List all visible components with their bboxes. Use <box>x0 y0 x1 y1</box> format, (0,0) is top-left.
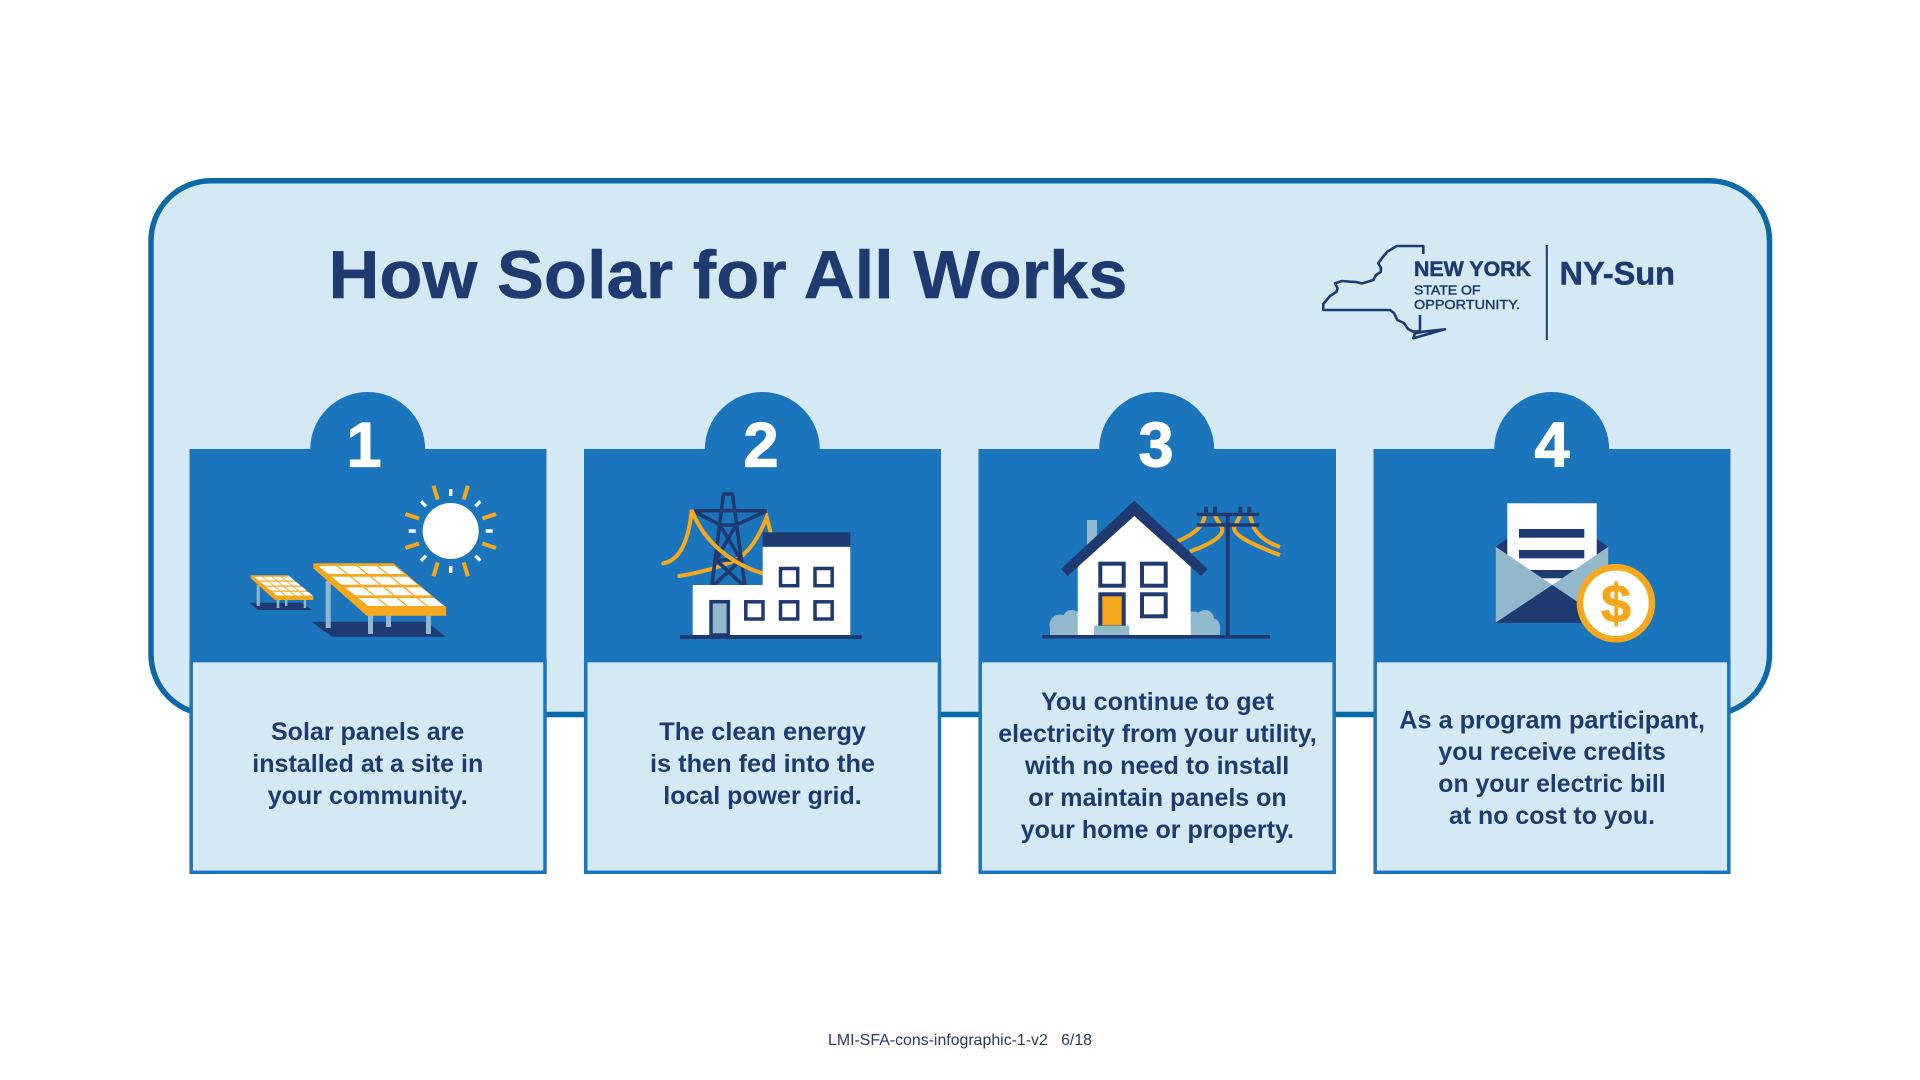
transmission tower <box>693 494 767 587</box>
step 3 text: your home or property. <box>1021 816 1294 844</box>
step 3 text: You continue to get <box>1041 688 1275 716</box>
house body <box>1078 513 1191 635</box>
panel: step 3 <box>978 392 1336 872</box>
icon: New York state outline <box>1323 246 1445 338</box>
logo text: NY-Sun: NY-Sun <box>1560 255 1675 291</box>
step 2 text: The clean energy <box>659 718 866 746</box>
letter lines <box>1519 529 1584 578</box>
step 2 text: is then fed into the <box>650 750 875 778</box>
icon: house and utility pole <box>1042 501 1280 639</box>
title: How Solar for All Works <box>328 237 1128 313</box>
building windows <box>746 568 832 619</box>
step 4 text <box>1399 706 1705 830</box>
step 1 text: Solar panels are <box>271 718 464 746</box>
door step <box>1094 626 1129 635</box>
dollar coin: $ <box>1601 574 1631 634</box>
dollar coin <box>1580 567 1652 639</box>
orange power line behind tower <box>679 517 771 576</box>
card header with number tab <box>1374 392 1730 662</box>
house windows <box>1100 564 1166 616</box>
number 1: 1 <box>346 410 382 480</box>
step 1 text: your community. <box>268 782 468 810</box>
panel: step 4 <box>1374 392 1730 872</box>
card header with number tab <box>190 392 546 662</box>
chimney <box>1087 520 1097 550</box>
large solar panel <box>312 563 446 637</box>
logo: New York State of Opportunity and NY-Sun <box>1323 245 1675 340</box>
step 4 text: As a program participant, <box>1399 706 1705 734</box>
orange power line in front of tower <box>663 510 763 574</box>
footer reference text: LMI-SFA-cons-infographic-1-v2 6/18 <box>828 1032 1092 1049</box>
step 4 text: at no cost to you. <box>1449 802 1655 830</box>
card text box <box>980 661 1334 872</box>
step 2 text <box>650 718 875 810</box>
card header with number tab <box>978 392 1336 662</box>
icon: envelope with bill and dollar coin <box>1496 503 1652 639</box>
step 3 text: or maintain panels on <box>1028 784 1287 812</box>
utility pole <box>1197 507 1259 635</box>
number 4: 4 <box>1534 410 1570 480</box>
bushes <box>1050 610 1220 636</box>
card text box <box>191 661 545 872</box>
ground line <box>680 635 862 639</box>
panel: step 1 <box>190 392 546 872</box>
logo text: State of: STATE OF <box>1414 282 1481 297</box>
step 3 text: electricity from your utility, <box>998 720 1317 748</box>
letter <box>1507 503 1597 585</box>
step 4 text: you receive credits <box>1438 738 1666 766</box>
icon: solar panels and sun <box>249 486 496 637</box>
sun <box>405 486 496 576</box>
envelope front <box>1496 585 1608 623</box>
small solar panel <box>249 575 313 610</box>
building <box>693 547 850 635</box>
logo divider <box>1546 245 1548 340</box>
logo text: New York: NEW YORK <box>1414 258 1531 281</box>
logo text: Opportunity: OPPORTUNITY. <box>1414 297 1520 312</box>
step 3 text <box>998 688 1317 844</box>
number 3: 3 <box>1138 410 1174 480</box>
step 1 text: installed at a site in <box>252 750 483 778</box>
number 2: 2 <box>743 410 779 480</box>
building door <box>711 602 728 635</box>
step 1 text <box>252 718 483 810</box>
step 3 text: with no need to install <box>1024 752 1289 780</box>
card text box <box>1375 661 1729 872</box>
envelope side flaps <box>1496 547 1608 623</box>
house roof <box>1061 501 1208 576</box>
orange utility wires <box>1178 516 1280 555</box>
panel: step 2 <box>584 392 941 872</box>
ground line <box>1042 635 1270 639</box>
house door <box>1100 594 1124 627</box>
envelope back <box>1496 538 1608 623</box>
step 4 text: on your electric bill <box>1438 770 1666 798</box>
background panel <box>151 181 1770 714</box>
card text box <box>586 661 940 872</box>
card header with number tab <box>584 392 941 662</box>
icon: transmission tower and building <box>663 494 862 639</box>
step 2 text: local power grid. <box>663 782 862 810</box>
building roof <box>763 532 850 547</box>
